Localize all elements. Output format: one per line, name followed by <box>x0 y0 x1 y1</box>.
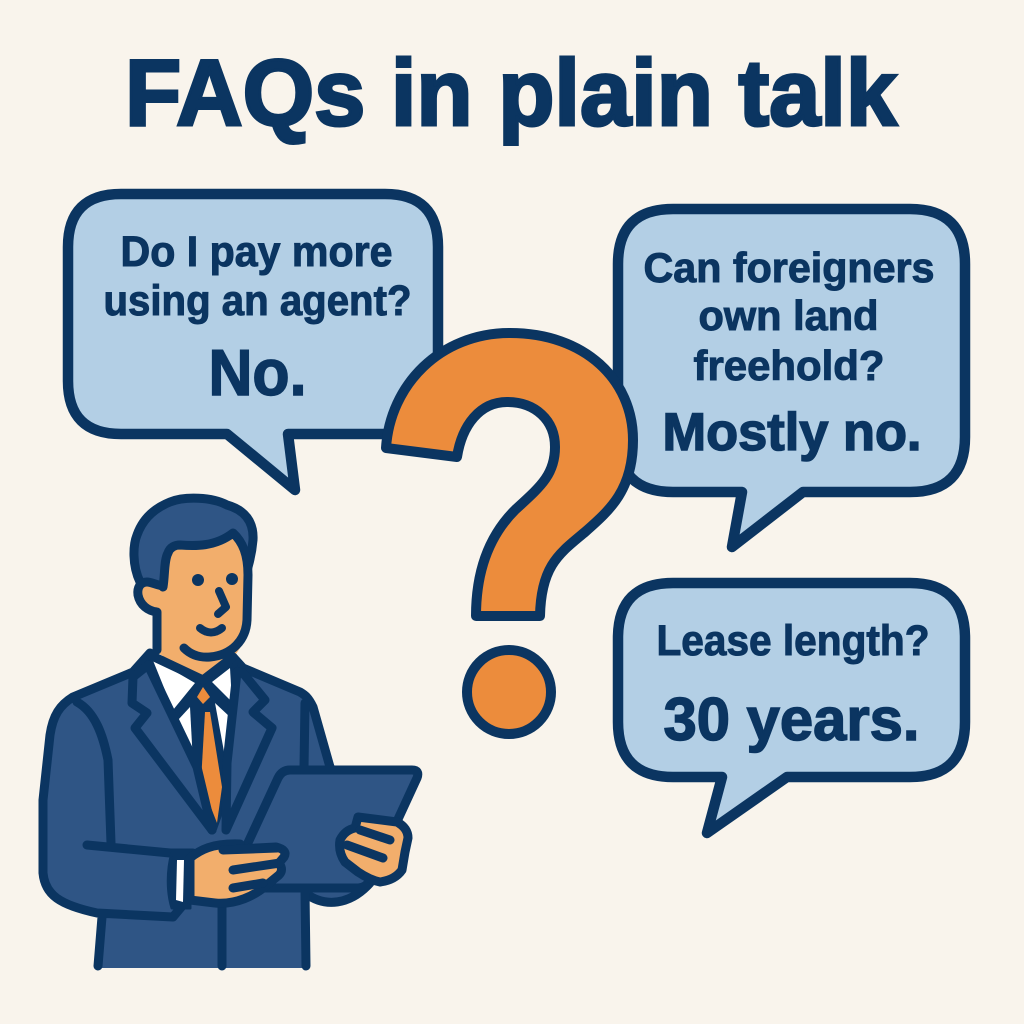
tie <box>197 687 222 823</box>
speech bubble: foreigners question: Mostly no. <box>662 403 922 462</box>
nose and mouth <box>200 591 226 632</box>
speech bubble: foreigners question: Can foreigners <box>644 244 934 291</box>
right sleeve <box>300 700 370 902</box>
face outline <box>150 533 248 680</box>
left hand <box>190 844 285 903</box>
speech bubble: lease length <box>618 583 965 833</box>
shirt dark base <box>150 660 233 830</box>
ear <box>138 582 165 612</box>
tablet <box>240 770 418 888</box>
shirt collar and front <box>152 658 232 763</box>
speech bubble: foreigners question: own land <box>698 292 878 339</box>
suit outline <box>43 653 330 966</box>
speech bubble: agent question: Do I pay more <box>120 228 392 276</box>
right hand <box>340 817 408 882</box>
speech bubble: foreigners question: freehold? <box>694 342 884 389</box>
title: FAQs in plain talk <box>125 40 898 145</box>
man with tablet <box>43 498 418 968</box>
speech bubble: lease length: 30 years. <box>664 686 920 753</box>
suit body fill <box>43 653 330 968</box>
speech bubble: agent question: No. <box>208 336 306 409</box>
speech bubble: foreigners question <box>618 209 965 547</box>
speech bubble: agent question <box>68 194 438 490</box>
lapels <box>132 665 272 830</box>
left cuff <box>168 853 190 908</box>
neck and face fill <box>156 533 248 679</box>
speech bubble: agent question: using an agent? <box>104 277 412 325</box>
speech bubble: lease length: Lease length? <box>656 617 930 665</box>
icon: question mark <box>386 333 633 734</box>
hair <box>134 498 253 590</box>
eyes <box>192 573 238 586</box>
